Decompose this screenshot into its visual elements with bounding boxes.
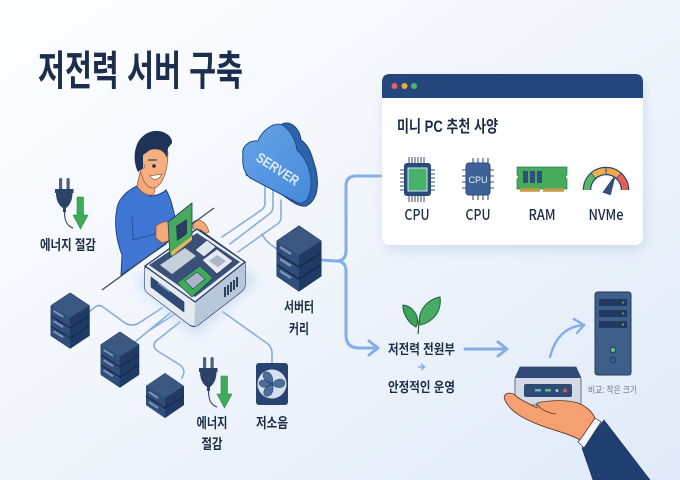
icon: RAM module — [517, 167, 567, 190]
server rack 3 — [146, 373, 184, 418]
hand and suit — [504, 393, 650, 480]
label: server carry: 서버터 — [284, 299, 314, 315]
label: size comparison: 비교: 작은 크기 — [588, 385, 637, 395]
spec labels: CPU — [404, 204, 430, 225]
panel header — [382, 74, 643, 98]
label: stable operation: 안정적인 운영 — [388, 380, 455, 395]
title: 저전력 서버 구축 — [38, 48, 243, 94]
server rack 1 — [51, 293, 89, 348]
panel: recommended specs — [382, 74, 644, 250]
label: energy saving bottom — [196, 415, 228, 452]
mini PC open case — [135, 203, 258, 335]
icon: CPU chip green — [400, 157, 435, 202]
label: low noise: 저소음 — [256, 415, 288, 431]
label: energy saving left: 에너지 절감 — [40, 237, 96, 253]
label: low power PSU: 저전력 전원부 — [388, 342, 455, 357]
label: server carry — [284, 299, 314, 337]
spec labels — [404, 204, 624, 225]
icon: gauge — [587, 171, 625, 194]
icon: CPU chip blue: CPU — [468, 175, 488, 185]
panel heading: 미니 PC 추천 사양 — [397, 117, 498, 136]
label: server carry: 커리 — [289, 321, 309, 337]
small arrow — [418, 364, 424, 370]
icon: plug with down arrow bottom — [199, 357, 232, 408]
arrow to mini PC — [465, 342, 507, 356]
cloud: SERVER — [243, 123, 317, 206]
icon: CPU chip blue — [462, 158, 494, 200]
server rack right — [277, 226, 321, 291]
spec labels: CPU — [466, 204, 490, 225]
label: energy saving bottom: 에너지 — [196, 415, 228, 431]
person — [116, 131, 209, 275]
icon: leaf sprout — [403, 297, 440, 334]
flow arrows to panel and power supply — [321, 176, 382, 355]
spec labels: NVMe — [588, 204, 624, 225]
tower PC — [595, 292, 631, 375]
server rack 2 — [101, 332, 139, 387]
cloud: SERVER: SERVER — [253, 149, 302, 189]
desk line — [102, 208, 214, 290]
icon: fan — [256, 363, 288, 405]
connection wires — [89, 185, 281, 378]
label: energy saving bottom: 절감 — [202, 436, 223, 452]
mini PC in hand — [515, 367, 581, 405]
spec labels: RAM — [528, 204, 556, 225]
icon: plug with down arrow — [55, 178, 88, 229]
curved arrow to tower — [550, 319, 584, 357]
